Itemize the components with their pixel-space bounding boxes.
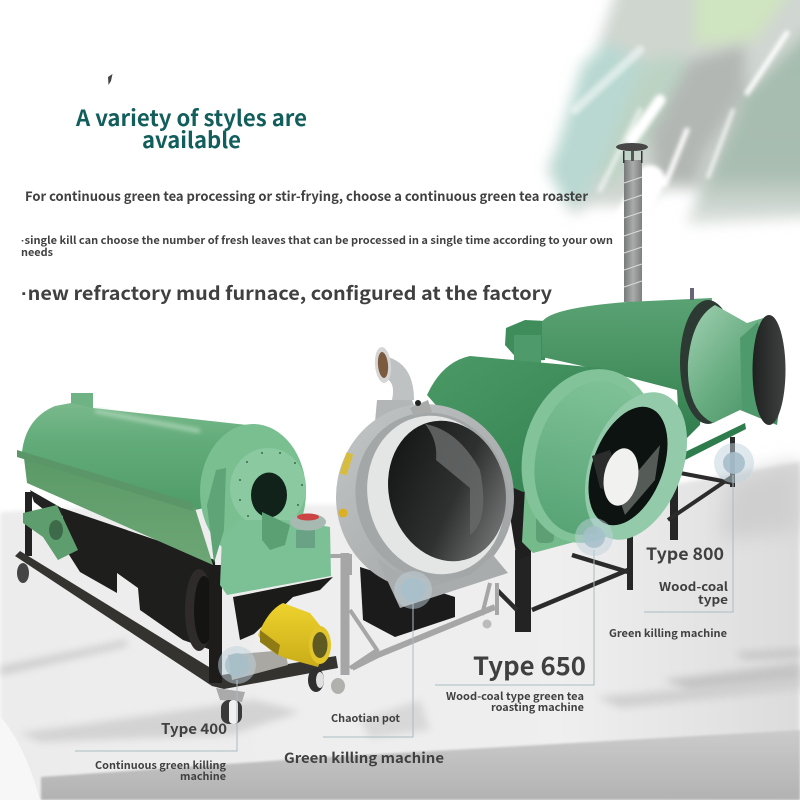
small dark speck [108, 74, 112, 85]
label: Type 650 [446, 647, 586, 715]
drum [336, 404, 514, 590]
funnel rim [565, 378, 707, 554]
label: Type 800: Green killing machine [609, 626, 727, 641]
top knob [410, 400, 432, 416]
text block: single kill: ·single kill can choose the number of fresh leaves that can be processed in a single time according to your own [21, 233, 613, 248]
black base [360, 567, 455, 637]
top drum [22, 403, 303, 510]
wheels [17, 563, 345, 724]
funnel opening [573, 396, 683, 536]
label: Type 400: machine [180, 769, 226, 784]
callout dots [218, 443, 754, 684]
motor mount plate [228, 650, 288, 680]
machine: Chaotian pot green killing machine [330, 346, 527, 675]
rear hopper [505, 320, 546, 362]
stand [497, 484, 633, 632]
text block: single kill [21, 233, 613, 260]
label: Type 400: Type 400 [161, 718, 227, 739]
gray frame [330, 553, 497, 675]
label: Type 800: Type 800 [646, 540, 724, 565]
funnel [688, 305, 785, 425]
left funnel [23, 505, 78, 560]
duct [373, 346, 420, 422]
label: Type 400: Continuous green killing [95, 758, 227, 773]
lower block [522, 488, 612, 553]
flange [504, 354, 676, 558]
warning plate [340, 452, 353, 475]
frame posts [25, 492, 32, 556]
label: Chaotian pot [284, 711, 444, 768]
body [427, 356, 640, 492]
blurred leaves top right [547, 0, 800, 230]
front flange [200, 424, 306, 560]
body [542, 298, 712, 445]
hopper [233, 577, 333, 640]
label: Type 650: roasting machine [491, 700, 584, 715]
bracket [377, 555, 508, 608]
text block: single kill: needs [21, 245, 53, 260]
title: available [142, 123, 241, 155]
chimney [71, 393, 93, 409]
perforated disc [230, 448, 306, 528]
black body [62, 508, 217, 652]
black band [680, 300, 736, 424]
lower drum [24, 458, 213, 565]
icon: chimney [616, 143, 648, 302]
label: Chaotian pot: Green killing machine [284, 748, 444, 768]
label: Type 650: Type 650 [473, 647, 586, 683]
machine: Type 400 continuous green killing machine [15, 393, 345, 724]
callout leader lines [75, 475, 733, 751]
text block: roaster choice: For continuous green tea processing or stir-frying, choose a continuous green tea roaster [25, 186, 588, 205]
front box [220, 520, 331, 595]
lid lip [17, 450, 193, 511]
label: Type 650: Wood-coal type green tea [446, 689, 584, 704]
stand [668, 423, 746, 540]
label: Type 800: type [698, 591, 728, 608]
label: Type 400 [95, 718, 227, 784]
machine: Type 800 wood-coal green killing machine [505, 143, 786, 540]
base frame [15, 551, 338, 689]
pulley [185, 569, 213, 651]
machine: Type 650 wood-coal green tea roasting machine [427, 354, 707, 632]
label: Chaotian pot: Chaotian pot [331, 711, 401, 726]
icon: yellow motor [258, 603, 331, 667]
title: A variety of styles are [75, 101, 307, 133]
title [75, 101, 307, 155]
label: Type 800 [609, 540, 728, 641]
text block: refractory mud furnace: ·new refractory mud furnace, configured at the factory [21, 280, 552, 306]
blower [290, 514, 326, 548]
label: Type 800: Wood-coal [659, 578, 728, 595]
dark opening [752, 315, 786, 425]
